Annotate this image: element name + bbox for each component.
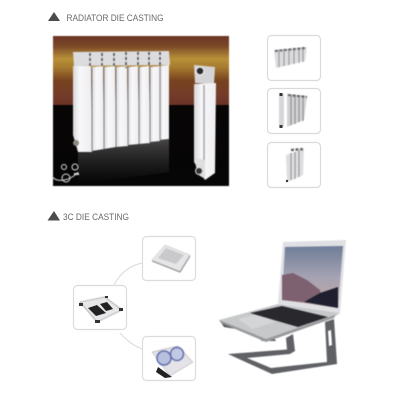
- card: laptop cooler underside: [74, 286, 126, 330]
- heading: 3C die casting: 3C DIE CASTING: [63, 212, 129, 222]
- large radiator: [73, 51, 170, 152]
- card: laptop cooler top: [142, 236, 196, 280]
- screen lid: [278, 240, 346, 313]
- card: laptop cooler with fans: [142, 336, 196, 380]
- illustration: laptop on stand: [219, 240, 346, 374]
- laptop base: [219, 304, 340, 342]
- panel: radiator photo: [52, 36, 229, 186]
- trackpad: [238, 314, 275, 329]
- icon: heading triangle radiator: [48, 12, 60, 21]
- thumbnail: radiator front: [268, 36, 320, 80]
- radiator reflection: [78, 139, 169, 184]
- single radiator section: [194, 65, 216, 180]
- stand: [228, 319, 337, 374]
- thumbnail: radiator section and body: [268, 88, 320, 134]
- heading: radiator die casting: RADIATOR DIE CASTING: [66, 13, 164, 23]
- keyboard: [250, 306, 328, 327]
- floral ornament: [52, 164, 79, 182]
- connector curves: [114, 263, 142, 349]
- stand feet: [220, 321, 236, 329]
- thumbnail: radiator angled: [268, 142, 320, 188]
- screen: [282, 246, 343, 308]
- mountains: [282, 273, 322, 304]
- icon: heading triangle 3C: [48, 211, 60, 220]
